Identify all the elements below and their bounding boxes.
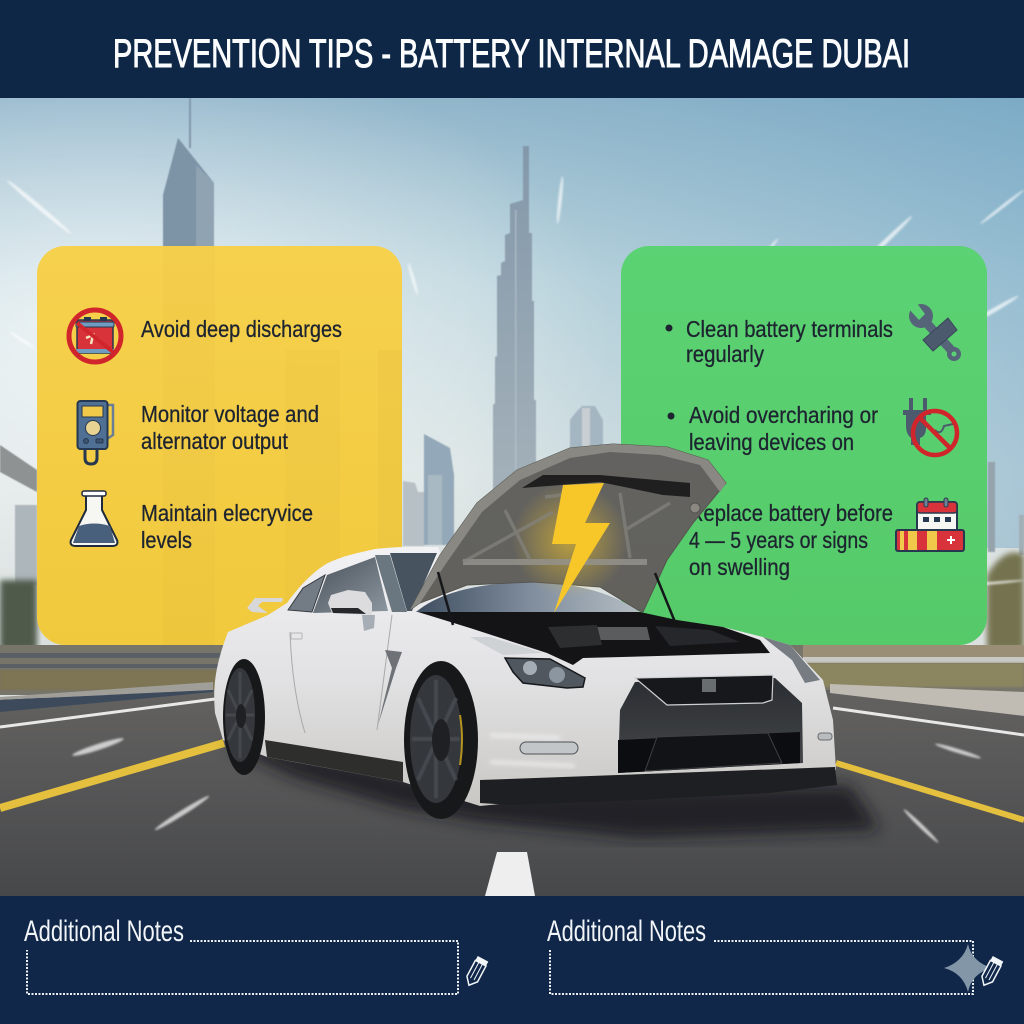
icon: multimeter (78, 401, 113, 464)
background: Dubai skyline (0, 98, 1024, 650)
rear wheel (223, 659, 265, 775)
fog light (520, 742, 578, 754)
rear spoiler (247, 598, 283, 613)
lightning bolt (552, 483, 610, 613)
tip text: monitor voltage: Monitor voltage and (141, 401, 319, 427)
badge (702, 679, 716, 692)
icon: flask (71, 491, 117, 546)
notes block left: Additional Notes (24, 915, 184, 948)
tip: avoid overcharging: Avoid overcharing or (689, 402, 878, 428)
front wheel (404, 661, 478, 819)
tip text: monitor voltage: alternator output (141, 428, 289, 454)
notes block right (547, 915, 973, 994)
background: road (0, 682, 1024, 896)
tip: avoid overcharging: leaving devices on (689, 429, 854, 455)
tip text: maintain levels: levels (141, 527, 192, 553)
footer band (0, 896, 1024, 1024)
side windows (288, 553, 437, 613)
notes block right: Additional Notes (547, 915, 706, 948)
bumper strakes (490, 735, 575, 766)
tip: clean terminals (666, 316, 893, 367)
front splitter (480, 767, 837, 805)
icon: wrench (908, 302, 961, 361)
tip: clean terminals: Clean battery terminals (686, 316, 893, 342)
side mirror (328, 590, 375, 631)
tip: replace battery: 4 — 5 years or signs (689, 527, 868, 553)
background: motion streaks (5, 176, 1024, 844)
icon: pencil left (464, 956, 488, 988)
tip text: monitor voltage (141, 401, 319, 454)
sparkle mark (944, 944, 992, 992)
headlight (505, 637, 820, 688)
hood (410, 444, 726, 612)
door seams and vent (290, 615, 392, 733)
icon: calendar and battery (896, 498, 964, 551)
windshield under hood (416, 582, 640, 612)
car: white sports car with open hood (214, 444, 880, 838)
tip: replace battery (689, 500, 893, 580)
icon: no deep discharge battery (69, 310, 121, 362)
background: sky (0, 98, 1024, 698)
hood struts (438, 572, 675, 625)
panel: yellow prevention tips (37, 246, 402, 645)
tip text: maintain levels (141, 500, 313, 553)
icon: plug prohibited (903, 398, 957, 455)
front grille (618, 675, 803, 773)
tip: replace battery: Replace battery before (689, 500, 893, 526)
panel: green prevention tips (621, 246, 987, 645)
side skirt (265, 740, 403, 782)
tip: replace battery: on swelling (689, 554, 790, 580)
notes block left (24, 915, 458, 994)
engine bay (418, 612, 770, 665)
header band (0, 0, 1024, 98)
background: guard rail and verge (0, 645, 1024, 695)
tip: clean terminals: regularly (686, 341, 764, 367)
car body (214, 547, 836, 806)
tip text: avoid deep discharges: Avoid deep discharges (141, 316, 342, 342)
silver fender strip (470, 637, 543, 655)
tip text: maintain levels: Maintain elecryvice (141, 500, 313, 526)
icon: pencil right (979, 956, 1003, 988)
tip: avoid overcharging (668, 402, 878, 455)
car shadow (225, 745, 880, 838)
